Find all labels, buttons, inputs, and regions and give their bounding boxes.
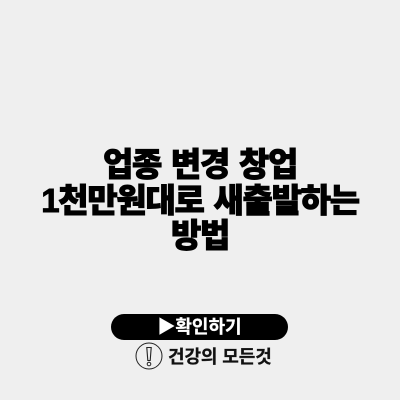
title: 1천만원대로 새출발하는 bbox=[41, 182, 359, 218]
button: 확인하기 bbox=[111, 314, 288, 340]
title bbox=[41, 146, 360, 254]
title: 방법 bbox=[171, 217, 229, 254]
icon: exclamation in circle bbox=[136, 342, 162, 370]
brand label: 건강의 모든것 bbox=[168, 347, 272, 367]
title: 업종 변경 창업 bbox=[103, 146, 297, 183]
button: 확인하기: ▶확인하기 bbox=[157, 317, 242, 337]
